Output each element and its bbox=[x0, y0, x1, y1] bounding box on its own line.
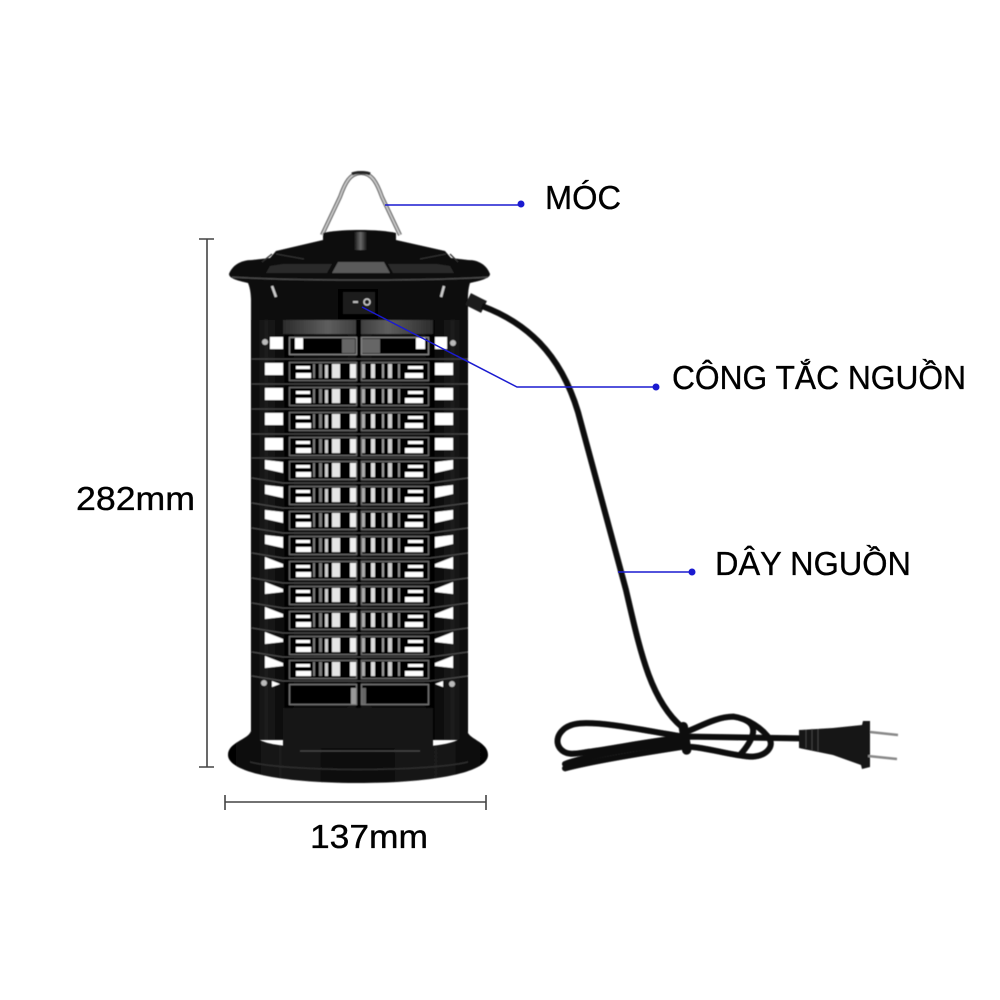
power cord bbox=[468, 299, 682, 727]
lamp base bbox=[228, 731, 488, 783]
power switch bbox=[338, 289, 378, 319]
callout: hook bbox=[385, 179, 621, 216]
hook bbox=[322, 172, 400, 235]
bottom dark panel row bbox=[261, 680, 455, 704]
callout: power switch: CÔNG TẮC NGUỒN bbox=[672, 359, 966, 396]
lamp bbox=[228, 172, 898, 783]
ventilation grid rows bbox=[252, 337, 468, 704]
width label: 137mm bbox=[310, 818, 428, 855]
lamp body bbox=[251, 300, 468, 748]
top dark panel row bbox=[262, 337, 456, 354]
callout: power cord bbox=[618, 545, 911, 582]
width dimension line bbox=[225, 795, 486, 810]
lamp top cap bbox=[229, 230, 490, 320]
callout: power cord: DÂY NGUỒN bbox=[715, 545, 911, 582]
height dimension line bbox=[199, 239, 214, 767]
callout: hook: MÓC bbox=[545, 179, 621, 216]
callout: power switch bbox=[362, 307, 966, 396]
plug and coiled cord bbox=[557, 717, 898, 769]
height label: 282mm bbox=[76, 480, 195, 517]
